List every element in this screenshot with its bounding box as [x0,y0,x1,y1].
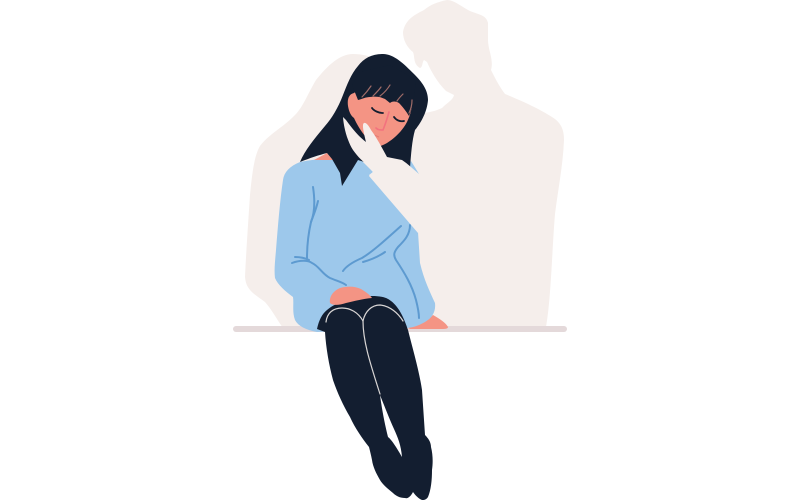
bangs [352,65,416,116]
woman [275,54,448,332]
sweater right shoulder sliver [405,161,419,174]
hand on ledge [408,315,448,329]
sweater [275,158,435,332]
face [348,80,412,146]
hair strands [362,85,412,113]
nose [376,112,389,130]
hair with collar tip [300,54,428,186]
man's hand touching the woman's cheek [343,117,419,233]
knee and thigh highlights [326,305,403,394]
lips [374,135,379,137]
hand on knee [330,287,372,305]
legs [317,287,433,500]
shelf [233,326,567,332]
leggings [317,296,433,500]
eyes [372,108,404,121]
sweater fold lines [292,187,419,318]
shadow silhouette of the man [400,0,564,327]
neck [314,153,333,160]
shadow silhouette of the woman [245,54,380,328]
